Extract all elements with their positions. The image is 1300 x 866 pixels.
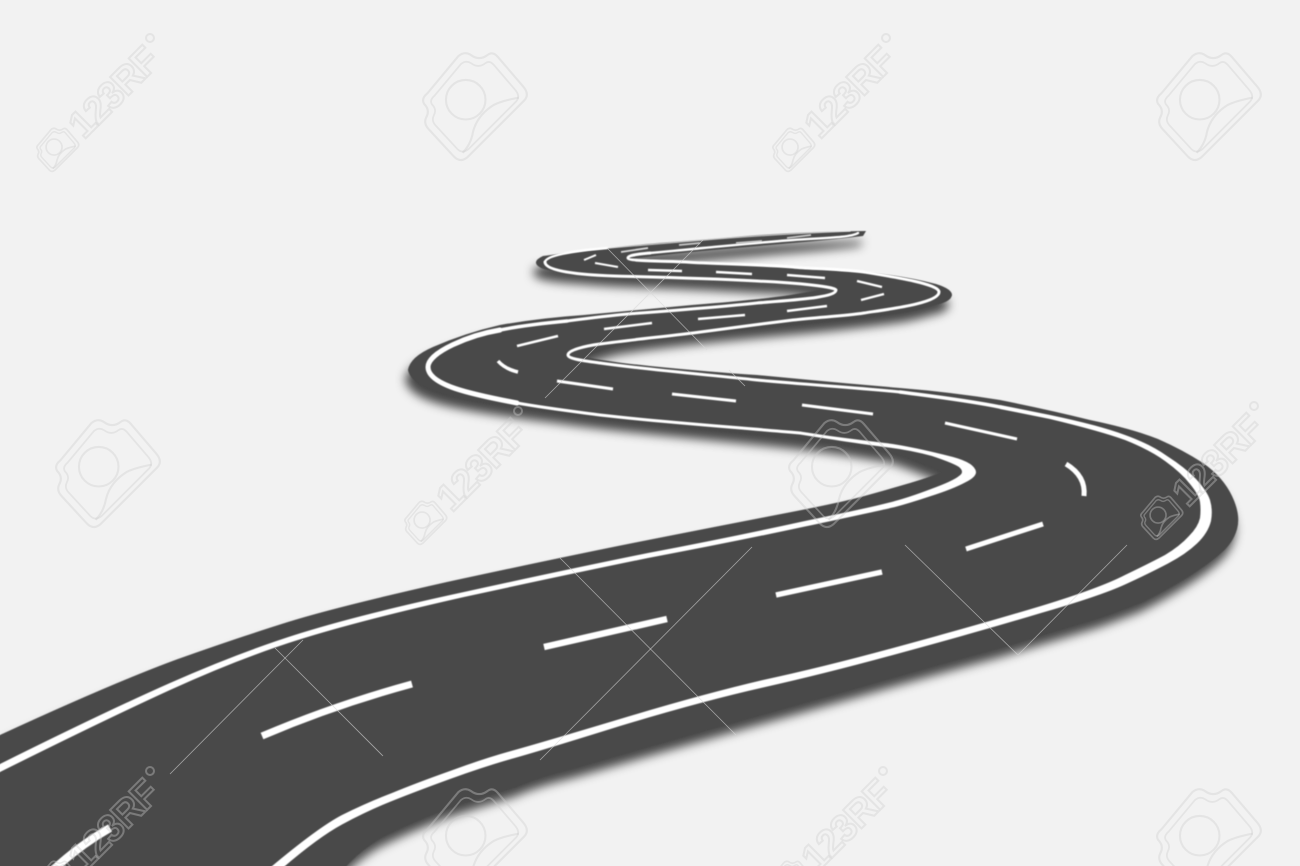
- watermark: centre: [405, 407, 535, 544]
- watermark: top left: 123RF: [61, 40, 167, 146]
- watermark: top centre: [773, 34, 903, 171]
- watermark: top centre: 123RF: [797, 40, 903, 146]
- road surface: [0, 231, 1238, 866]
- inner edge line: [0, 231, 976, 777]
- watermark: top left: [37, 34, 167, 171]
- watermark: right bend: 123RF: [1165, 408, 1271, 514]
- watermark: right bend: [1141, 402, 1271, 539]
- thin crossing watermark lines: [170, 240, 1127, 774]
- outer edge line: [265, 233, 1212, 866]
- watermark: centre: 123RF: [429, 413, 535, 519]
- road drop shadow: [0, 241, 1235, 866]
- centre lane dashes: [53, 235, 1084, 866]
